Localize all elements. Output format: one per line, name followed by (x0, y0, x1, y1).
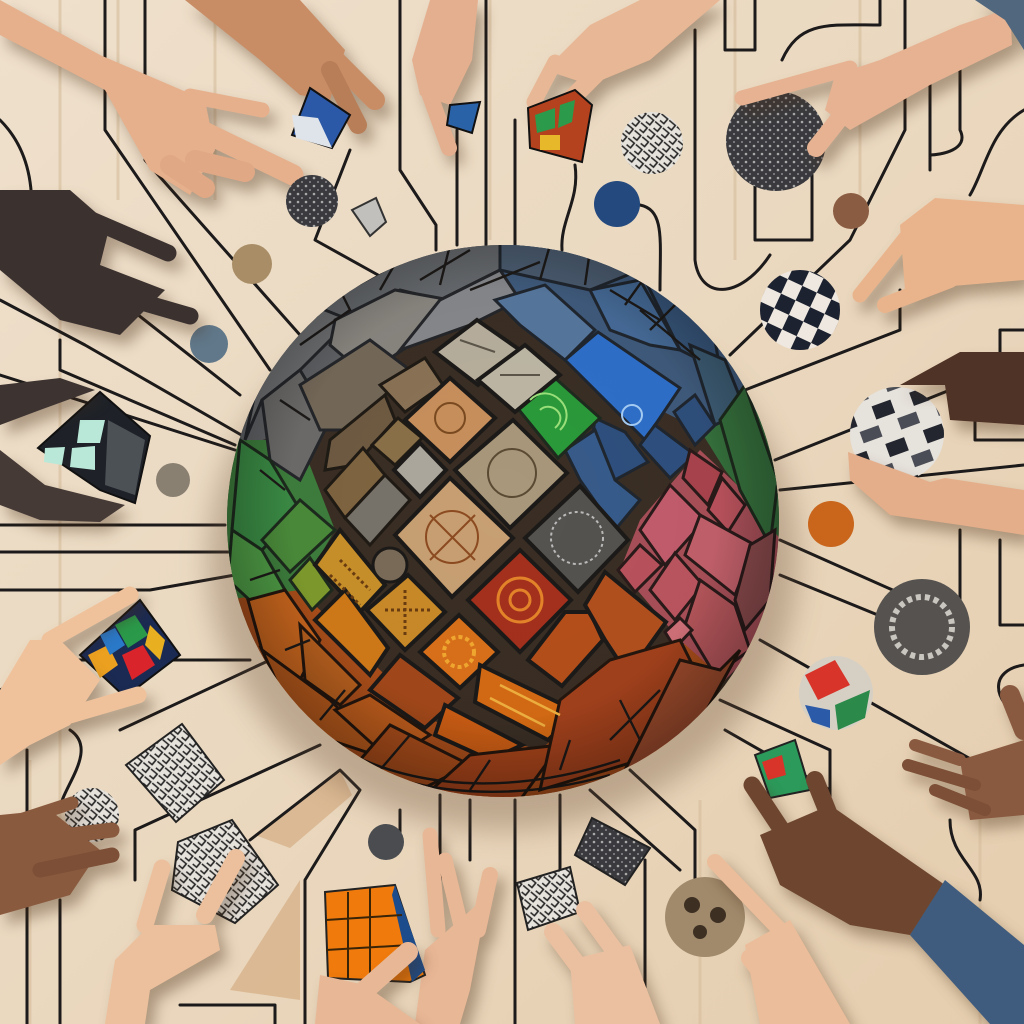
hand: left upper dark (0, 190, 190, 335)
hand: bottom right light (715, 862, 850, 1024)
ball: rubik style right (799, 656, 873, 730)
region: brown left tiles (325, 358, 443, 545)
cube: rubik top centre (528, 90, 592, 162)
ball: maze lower left (65, 788, 119, 842)
sphere shadow (208, 290, 798, 830)
hand: left middle dark (0, 378, 125, 522)
cube: dark bottom (575, 818, 650, 885)
ball: blue grey left (190, 325, 228, 363)
cube: dark left middle (38, 392, 150, 503)
ball: orange patterned right (808, 501, 854, 547)
cube: blue white top (292, 88, 350, 148)
ball: small dark bottom (368, 824, 404, 860)
region: blue-grey top right tiles (495, 235, 745, 530)
hand: bottom left light (105, 858, 236, 1024)
ball: tan left (232, 244, 272, 284)
ball: small left (156, 463, 190, 497)
objects: cubes and balls (38, 88, 970, 957)
tile grout pattern (250, 245, 700, 792)
cube: orange bottom (325, 885, 425, 982)
sphere shading (227, 245, 779, 797)
region: pink right tiles (618, 450, 775, 675)
hand: top centre (412, 0, 478, 148)
ball: small blue cluster (594, 181, 640, 227)
ball: checkered right (850, 387, 944, 481)
tile surface ornaments (330, 340, 642, 726)
ball: black white top (621, 112, 683, 174)
hand: bottom centre behind cube (415, 835, 490, 1024)
ball: dark textured top left (286, 175, 338, 227)
hand: right middle, dark and light holding ball (848, 352, 1024, 535)
hand: right lower brown (908, 695, 1024, 820)
region: green left and right tiles (228, 378, 778, 610)
hand: right upper (860, 198, 1024, 305)
cube: small blue top (447, 102, 480, 133)
hand: top right with sleeve (742, 0, 1024, 148)
hand: bottom right brown with sleeve (752, 780, 1024, 1024)
ball: lattice bottom (665, 877, 745, 957)
region: orange bottom tiles (248, 590, 740, 800)
hand: lower left brown (0, 803, 112, 915)
region: central diamond tiles (315, 320, 666, 760)
ball: maze large right (874, 579, 970, 675)
cube: rubik left (80, 600, 180, 697)
cube: rubik lower right (755, 740, 810, 798)
hand: top left light (0, 0, 293, 195)
hand: bottom centre thumb and wrist (315, 952, 420, 1024)
region: grey top tiles (245, 235, 520, 480)
cube: white small bottom (517, 867, 580, 930)
puzzle sphere (220, 235, 790, 820)
hand: top centre right (534, 0, 720, 102)
cube: maze bottom left (172, 820, 278, 923)
hand: left lower light (0, 595, 138, 765)
cube: maze lower left (126, 724, 224, 822)
ball: small brown right (833, 193, 869, 229)
sphere base colour regions (220, 235, 790, 820)
hand: top second (185, 0, 375, 125)
ball: checkered right upper (760, 270, 840, 350)
hand: bottom centre right (553, 910, 660, 1024)
cube: small grey (352, 198, 386, 236)
ball: large speckled top right (726, 91, 826, 191)
small bead on sphere (373, 548, 407, 582)
